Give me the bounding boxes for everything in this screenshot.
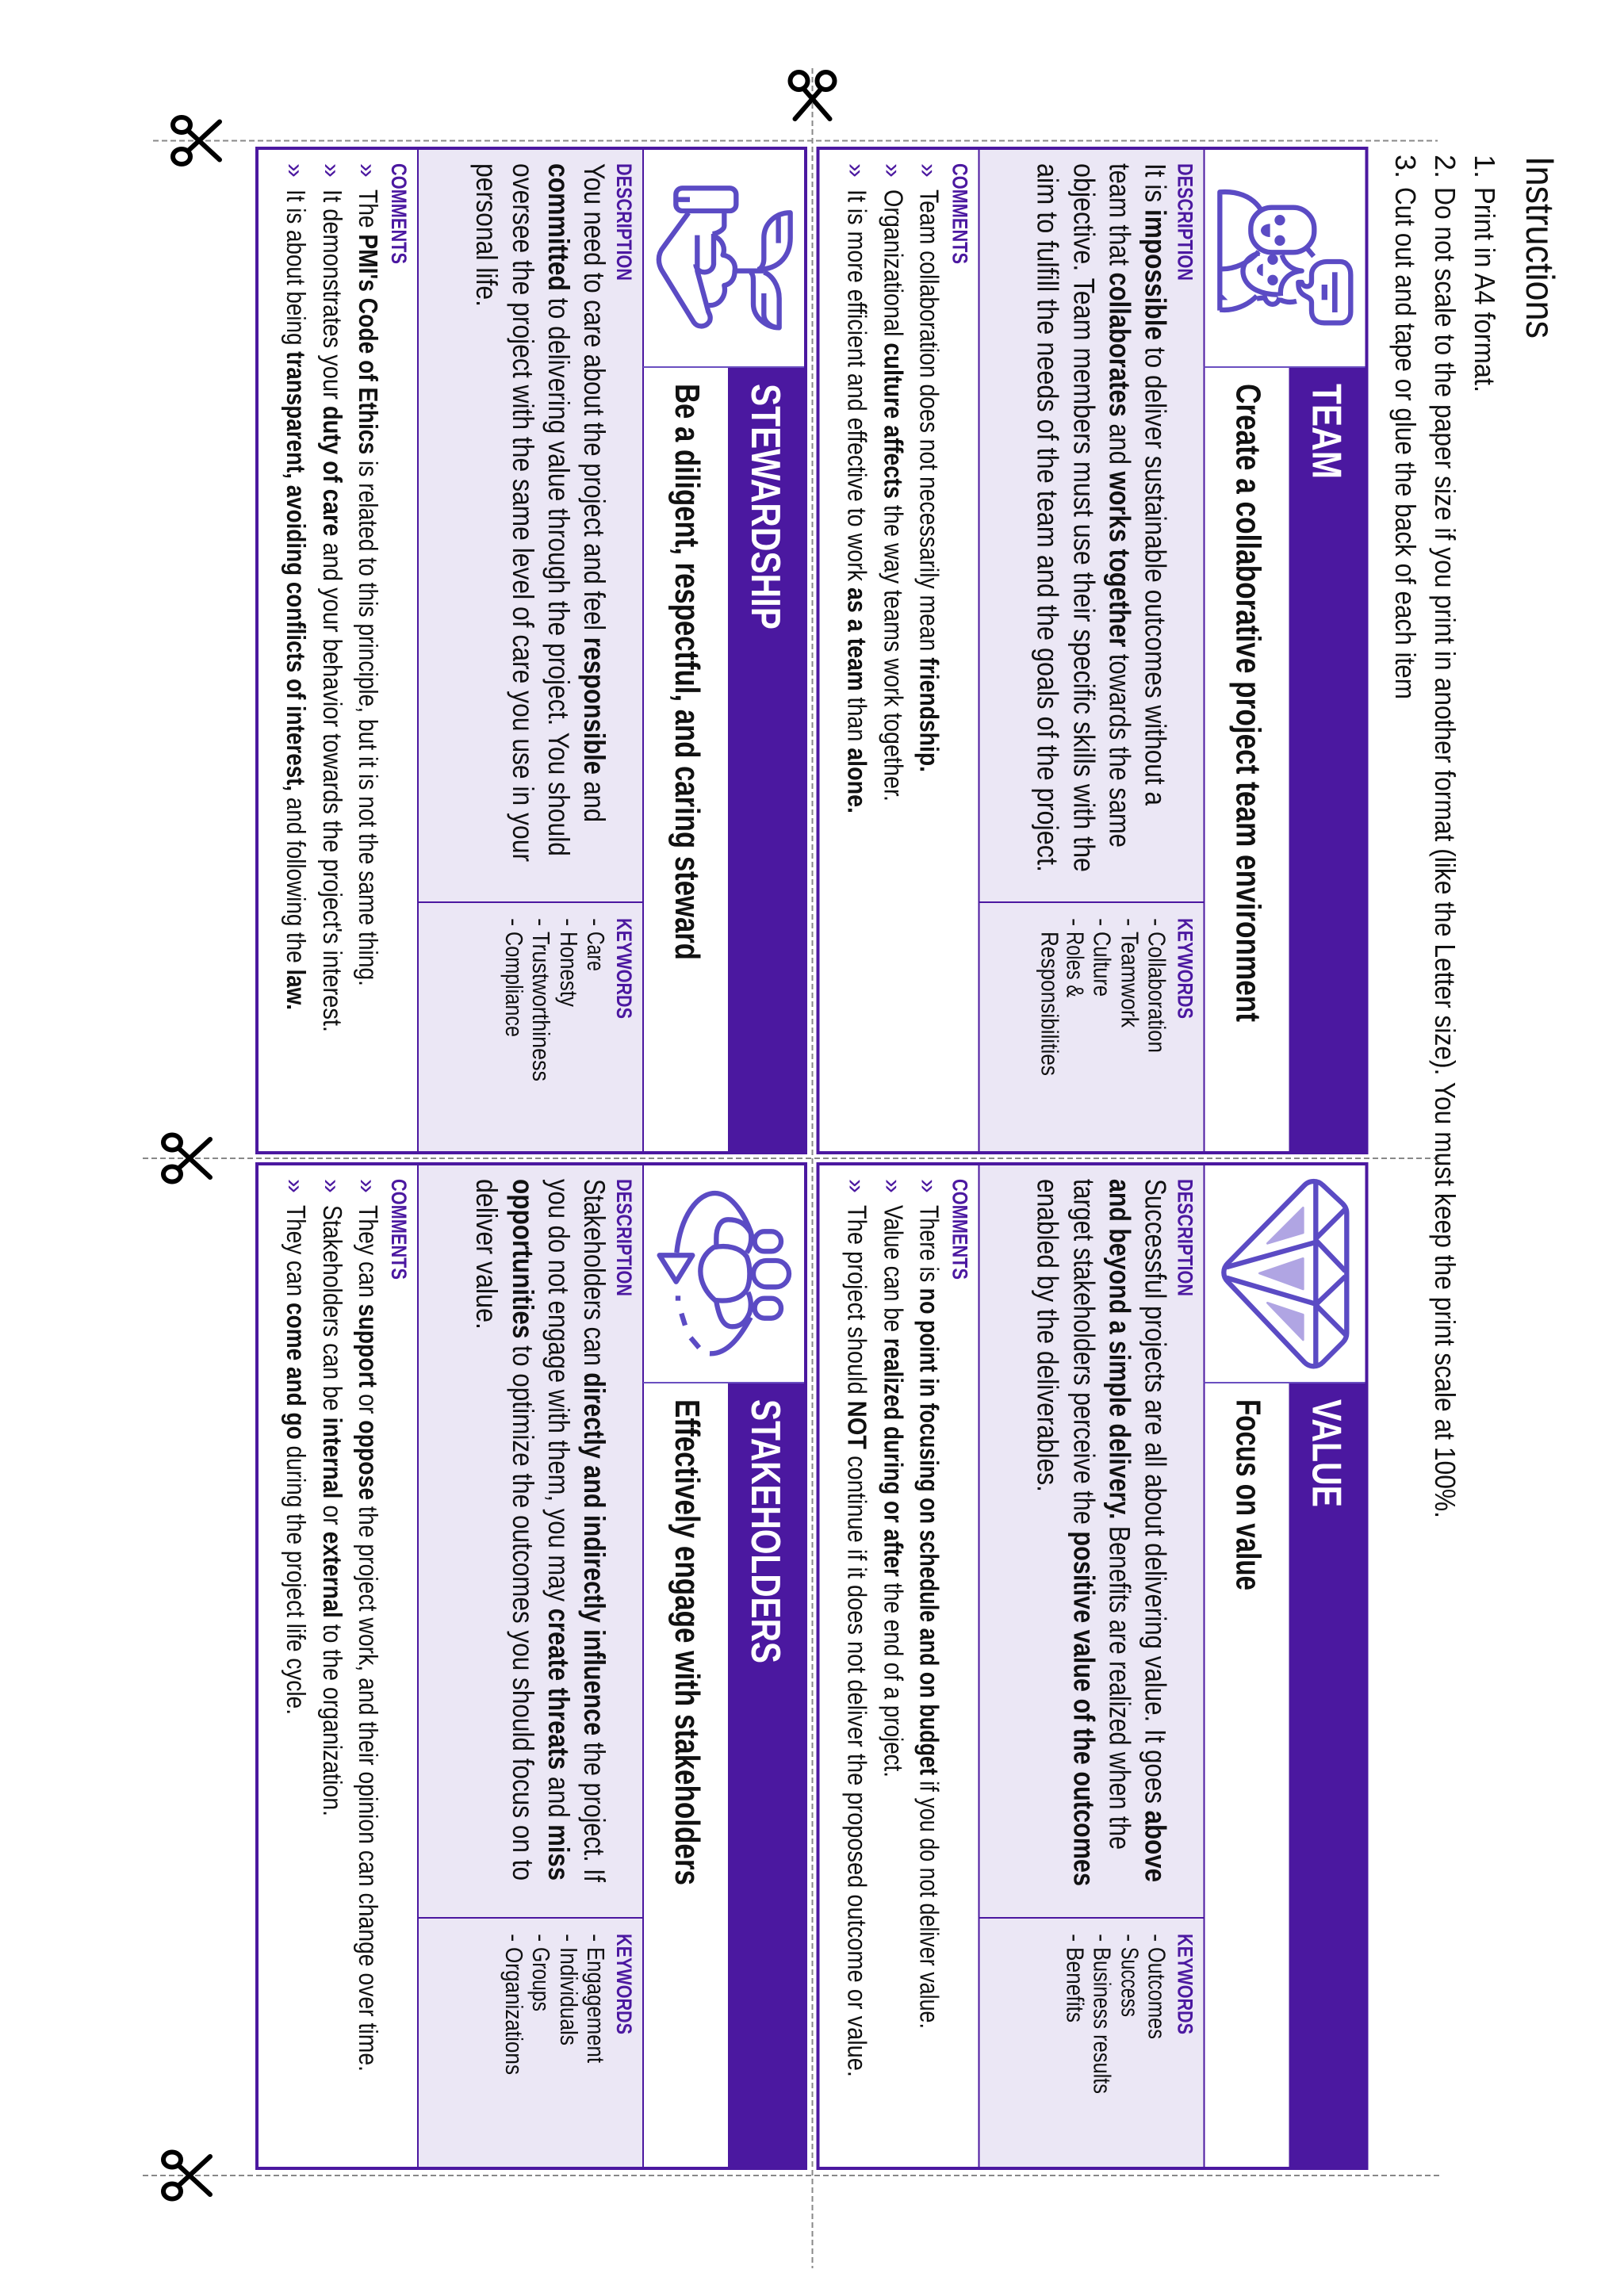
instruction 1: 1. xyxy=(1469,155,1501,178)
keywords: Engagement xyxy=(582,1947,610,2063)
description: and beyond a simple delivery. Benefits are realized when the xyxy=(1104,1179,1136,1850)
comments: » xyxy=(879,1179,907,1193)
comments: » xyxy=(842,1179,871,1193)
panel: team card xyxy=(818,147,1369,1154)
description: It is impossible to deliver sustainable outcomes without a xyxy=(1139,163,1172,806)
keywords xyxy=(1061,1934,1197,2094)
keywords: - xyxy=(1061,1934,1090,1942)
description: DESCRIPTION xyxy=(1174,163,1197,281)
comments xyxy=(842,163,972,813)
comments: » xyxy=(915,1179,944,1193)
comments: » xyxy=(282,1179,310,1193)
comments: Team collaboration does not necessarily mean friendship. xyxy=(915,189,944,772)
keywords: Responsibilities xyxy=(1036,932,1064,1076)
comments: Organizational culture affects the way teams work together. xyxy=(879,189,909,802)
comments xyxy=(282,1179,411,2072)
keywords xyxy=(1036,918,1197,1076)
comments: It is more efficient and effective to work as a team than alone. xyxy=(842,189,872,813)
comments: » xyxy=(318,163,347,178)
description: team that collaborates and works together towards the same xyxy=(1104,163,1136,848)
icon: diamond xyxy=(1224,1181,1346,1366)
keywords: - xyxy=(527,1934,555,1942)
description: objective. Team members must use their specific skills with the xyxy=(1067,163,1101,872)
description: DESCRIPTION xyxy=(1174,1179,1197,1296)
keywords: KEYWORDS xyxy=(1174,1934,1197,2034)
icon: hand holding a plant xyxy=(659,188,791,327)
card subtitle: Focus on value xyxy=(1229,1399,1267,1590)
keywords: - xyxy=(500,1934,528,1942)
comments: » xyxy=(318,1179,347,1193)
keywords: Collaboration xyxy=(1143,932,1170,1053)
keywords: Care xyxy=(582,932,610,971)
keywords: - xyxy=(1143,1934,1170,1942)
keywords: Benefits xyxy=(1061,1947,1090,2022)
comments: There is no point in focusing on schedule and on budget if you do not deliver value. xyxy=(915,1205,944,2029)
keywords: - xyxy=(500,918,528,926)
keywords: Teamwork xyxy=(1116,932,1143,1027)
comments: The project should NOT continue if it does not deliver the proposed outcome or value. xyxy=(842,1205,872,2077)
description: Successful projects are all about delivering value. It goes above xyxy=(1139,1179,1172,1882)
icon: scissors bottom left xyxy=(163,2152,210,2199)
title band xyxy=(1289,1383,1369,2170)
comments: COMMENTS xyxy=(948,163,972,264)
keywords: Business results xyxy=(1088,1947,1116,2094)
instruction 2: 2. xyxy=(1429,155,1461,178)
instructions text block xyxy=(1389,155,1562,1518)
description: deliver value. xyxy=(470,1179,503,1330)
keywords: - xyxy=(582,1934,610,1942)
keywords: KEYWORDS xyxy=(612,1934,636,2034)
comments: COMMENTS xyxy=(387,163,411,264)
title band xyxy=(728,367,807,1154)
card subtitle: Effectively engage with stakeholders xyxy=(668,1399,707,1885)
card subtitle: Be a diligent, respectful, and caring steward xyxy=(668,384,707,960)
instructions heading: Instructions xyxy=(1518,156,1562,339)
comments: It demonstrates your duty of care and your behavior towards the project's interest. xyxy=(318,189,347,1032)
keywords: - xyxy=(1143,918,1170,926)
keywords: Compliance xyxy=(500,932,528,1037)
keywords: Roles & xyxy=(1061,932,1090,997)
icon: scissors top left xyxy=(173,117,220,164)
keywords: - xyxy=(555,1934,583,1942)
keywords: Outcomes xyxy=(1143,1947,1170,2039)
comments: » xyxy=(879,163,907,178)
description: aim to fulfill the needs of the team and the goals of the project. xyxy=(1031,163,1064,872)
keywords: - xyxy=(582,918,610,926)
keywords: Trustworthiness xyxy=(527,932,555,1081)
description: target stakeholders perceive the positive value of the outcomes xyxy=(1067,1179,1101,1886)
panel: stewardship card xyxy=(257,147,807,1154)
keywords: Success xyxy=(1116,1947,1143,2017)
keywords xyxy=(500,1934,636,2075)
description xyxy=(1031,163,1197,872)
description xyxy=(470,163,636,862)
keywords: Honesty xyxy=(555,932,583,1007)
description: committed to delivering value through the project. You should xyxy=(542,163,575,856)
keywords: - xyxy=(555,918,583,926)
keywords: Culture xyxy=(1088,932,1116,997)
keywords: - xyxy=(1116,1934,1143,1942)
comments xyxy=(842,1179,972,2077)
comments: » xyxy=(842,163,871,178)
description: Stakeholders can directly and indirectly influence the project. If xyxy=(578,1179,611,1883)
keywords: KEYWORDS xyxy=(612,918,636,1019)
comments: » xyxy=(354,163,382,178)
card title: TEAM xyxy=(1304,384,1350,479)
description: opportunities to optimize the outcomes you should focus on to xyxy=(507,1179,539,1881)
keywords: - xyxy=(1088,1934,1116,1942)
keywords xyxy=(500,918,636,1081)
description: oversee the project with the same level of care you use in your xyxy=(507,163,539,862)
comments: It is about being transparent, avoiding conflicts of interest, and following the law. xyxy=(282,189,311,1010)
icon: team people with speech bubble xyxy=(1220,192,1350,323)
comments: They can come and go during the project life cycle. xyxy=(282,1205,311,1715)
card title: STEWARDSHIP xyxy=(742,384,788,629)
description: DESCRIPTION xyxy=(612,1179,636,1296)
instruction 3: Cut out and tape or glue the back of each item xyxy=(1389,187,1422,699)
icon: scissors top centre xyxy=(790,72,834,119)
card title: VALUE xyxy=(1304,1399,1350,1507)
instruction 1: Print in A4 format. xyxy=(1469,187,1501,392)
instruction 3: 3. xyxy=(1389,155,1422,178)
comments: Stakeholders can be internal or external to the organization. xyxy=(318,1205,347,1816)
panel: stakeholders card xyxy=(257,1163,807,2170)
description: DESCRIPTION xyxy=(612,163,636,281)
comments: COMMENTS xyxy=(387,1179,411,1280)
comments xyxy=(282,163,411,1032)
comments: » xyxy=(915,163,944,178)
description xyxy=(470,1179,636,1883)
description: you do not engage with them, you may create threats and miss xyxy=(542,1179,575,1881)
comments: » xyxy=(282,163,310,178)
keywords: - xyxy=(1088,918,1116,926)
comments: They can support or oppose the project work, and their opinion can change over time. xyxy=(354,1205,383,2072)
keywords: - xyxy=(1116,918,1143,926)
title band xyxy=(1289,367,1369,1154)
description: enabled by the deliverables. xyxy=(1031,1179,1064,1492)
panel: value card xyxy=(818,1163,1369,2170)
comments: The PMI's Code of Ethics is related to this principle, but it is not the same thing. xyxy=(354,189,383,986)
card title: STAKEHOLDERS xyxy=(742,1399,788,1663)
keywords: - xyxy=(527,918,555,926)
comments: » xyxy=(354,1179,382,1193)
keywords: - xyxy=(1061,918,1090,926)
description: personal life. xyxy=(470,163,503,307)
icon: stakeholders group with cycle arrow xyxy=(660,1193,789,1353)
keywords: Individuals xyxy=(555,1947,583,2045)
description xyxy=(1031,1179,1197,1886)
description: You need to care about the project and feel responsible and xyxy=(578,163,611,822)
keywords: KEYWORDS xyxy=(1174,918,1197,1019)
icon: scissors middle left xyxy=(163,1135,210,1181)
instruction 2: Do not scale to the paper size if you print in another format (like the Letter size). You must keep the print scale at 100%. xyxy=(1429,187,1461,1518)
card subtitle: Create a collaborative project team environment xyxy=(1229,384,1267,1022)
title band xyxy=(728,1383,807,2170)
keywords: Groups xyxy=(527,1947,555,2011)
comments: Value can be realized during or after the end of a project. xyxy=(879,1205,909,1777)
keywords: Organizations xyxy=(500,1947,528,2075)
comments: COMMENTS xyxy=(948,1179,972,1280)
